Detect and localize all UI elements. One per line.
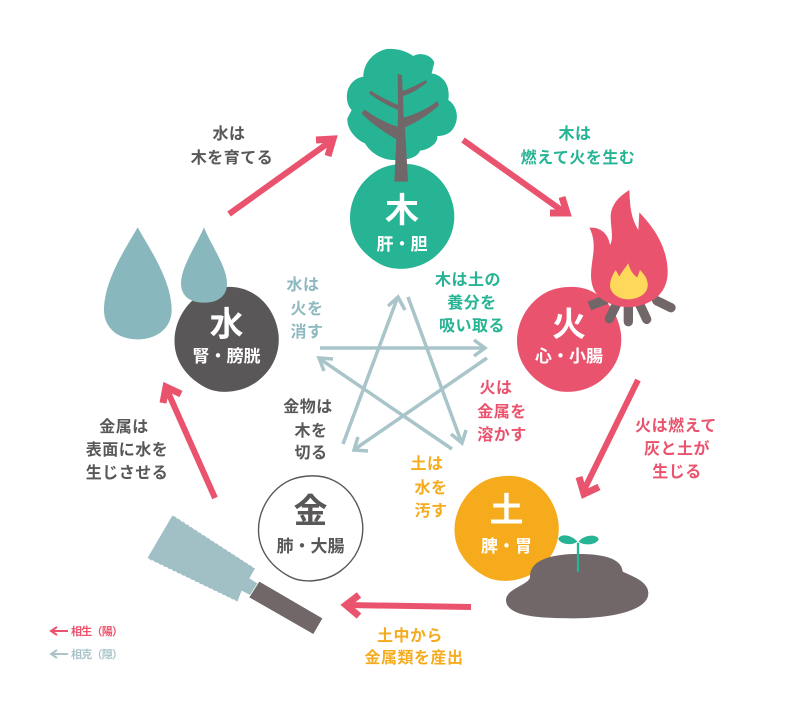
text: water extinguishes fire: 消す xyxy=(290,323,324,341)
text: metal cuts wood xyxy=(283,397,333,462)
text: fire melts metal xyxy=(477,380,527,444)
text: water extinguishes fire: 水は xyxy=(286,276,320,294)
legend: restraint xyxy=(51,647,123,661)
panel: water circle xyxy=(174,287,279,392)
text: fire makes earth: 灰と土が xyxy=(644,439,710,458)
panel: earth circle: 土 xyxy=(490,492,524,530)
text: metal cuts wood: 金物は xyxy=(283,397,333,416)
text: metal cuts wood: 切る xyxy=(294,444,328,462)
arrow: water to wood xyxy=(229,139,333,214)
text: wood absorbs earth: 吸い取る xyxy=(439,317,505,335)
text: earth yields metal: 土中から xyxy=(377,627,443,645)
panel: water circle: 水 xyxy=(210,306,244,344)
legend: generation xyxy=(51,624,123,638)
label: fire organs: 火 xyxy=(552,306,586,344)
panel: wood circle: 木 xyxy=(385,192,419,230)
arrow: wood to fire xyxy=(463,140,567,213)
panel: water circle: 腎・膀胱 xyxy=(192,347,260,366)
panel: earth circle xyxy=(454,476,559,581)
text: earth fouls water: 土は xyxy=(410,455,444,473)
label: fire organs xyxy=(535,306,603,366)
text: fire melts metal: 火は xyxy=(479,380,513,397)
panel: wood circle: 肝・胆 xyxy=(376,235,428,254)
panel: metal circle xyxy=(258,476,363,581)
text: wood absorbs earth: 木は土の xyxy=(435,271,501,289)
text: earth yields metal: 金属類を産出 xyxy=(364,648,464,667)
label: fire organs: 心・小腸 xyxy=(535,347,603,366)
icon: water drops xyxy=(104,227,227,339)
text: wood feeds fire: 燃えて火を生む xyxy=(521,148,635,167)
text: wood absorbs earth xyxy=(435,271,505,335)
text: metal cuts wood: 木を xyxy=(294,422,328,440)
icon: fire xyxy=(517,190,671,392)
text: wood absorbs earth: 養分を xyxy=(447,293,497,312)
panel: earth circle: 脾・胃 xyxy=(481,537,532,556)
text: metal yields water: 金属は xyxy=(99,417,149,436)
text: metal yields water xyxy=(86,417,168,482)
icon: soil with sprout xyxy=(506,535,648,618)
text: fire makes earth xyxy=(635,416,717,481)
text: fire makes earth: 生じる xyxy=(652,463,702,481)
text: fire melts metal: 溶かす xyxy=(477,426,527,444)
text: water nourishes wood: 水は xyxy=(212,125,246,143)
arrow: metal to water xyxy=(163,387,215,498)
legend: generation: 相生（陽） xyxy=(71,624,123,638)
text: metal yields water: 生じさせる xyxy=(86,464,168,482)
panel: metal circle: 金 xyxy=(294,493,328,531)
text: fire makes earth: 火は燃えて xyxy=(635,416,717,435)
icon: saw xyxy=(147,514,322,634)
text: wood feeds fire xyxy=(521,125,635,167)
text: fire melts metal: 金属を xyxy=(477,402,527,421)
arrow: earth to metal xyxy=(346,595,471,616)
arrow: wood controls earth xyxy=(408,297,466,443)
text: water nourishes wood: 木を育てる xyxy=(191,148,273,167)
text: earth fouls water: 水を xyxy=(414,479,448,497)
legend: restraint: 相克（隠） xyxy=(71,647,123,661)
arrow: earth controls water xyxy=(319,358,452,449)
arrow: fire to earth xyxy=(579,380,638,494)
arrow: fire controls metal xyxy=(354,358,487,451)
arrow: metal controls wood xyxy=(343,297,405,444)
text: wood feeds fire: 木は xyxy=(558,125,592,143)
text: water extinguishes fire: 火を xyxy=(290,300,324,318)
text: water nourishes wood xyxy=(191,125,273,167)
text: earth yields metal xyxy=(364,627,464,667)
icon: tree xyxy=(347,49,457,182)
arrow: water controls fire xyxy=(320,340,485,356)
text: water extinguishes fire xyxy=(286,276,324,341)
text: earth fouls water xyxy=(410,455,448,520)
text: metal yields water: 表面に水を xyxy=(86,441,168,459)
panel: wood circle xyxy=(350,164,454,269)
panel: metal circle: 肺・大腸 xyxy=(276,537,344,556)
text: earth fouls water: 汚す xyxy=(414,502,448,520)
